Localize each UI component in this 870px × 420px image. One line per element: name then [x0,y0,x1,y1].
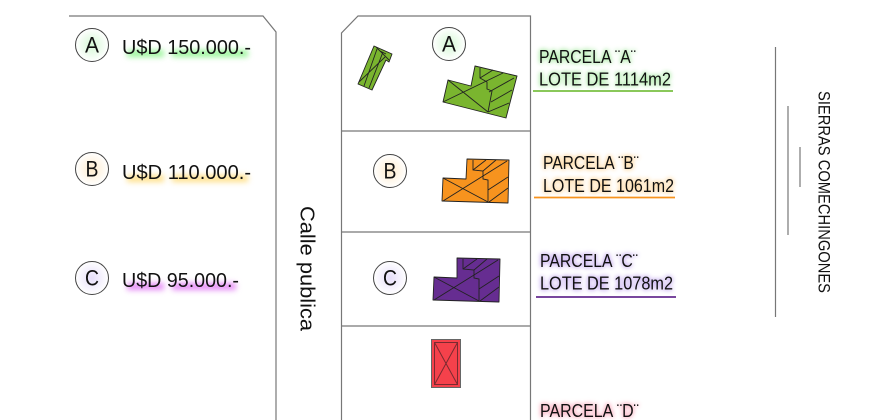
price C: U$D 95.000.- [122,270,239,292]
road label: Calle publica [296,206,318,332]
small building A [358,46,392,90]
label: parcel B [534,153,675,198]
panel: site plan [341,16,531,420]
badge: plot C: C [383,266,397,290]
mountain range label: SIERRAS COMECHINGONES [814,91,834,293]
plot A [358,28,517,118]
label: parcel A: PARCELA ¨A¨ [539,47,636,67]
badge: plot B: B [384,158,396,184]
price B: U$D 110.000.- [122,162,251,184]
badge: plot A: A [442,32,456,56]
main building A [443,66,517,118]
price A: U$D 150.000.- [122,37,251,59]
label: parcel A [533,47,673,91]
plot D building [432,340,460,388]
building B [442,159,509,203]
badge: price C [76,262,108,294]
building C [433,258,500,302]
badge: price B [76,152,108,186]
panel: price list [69,16,276,420]
label: parcel B: LOTE DE 1061m2 [543,176,674,196]
plot C [374,258,500,302]
label: parcel C: LOTE DE 1078m2 [540,274,673,294]
plot B [374,154,509,203]
badge: plot A [432,28,466,60]
left boundary line [69,16,276,420]
label: parcel B: PARCELA ¨B¨ [543,153,639,173]
badge: price C: C [85,266,99,290]
badge: price A [76,28,108,62]
badge: price B: B [86,156,98,182]
badge: price A: A [85,32,99,58]
site outline [342,16,530,420]
label: parcel C [536,251,676,297]
label: parcel A: LOTE DE 1114m2 [539,70,671,90]
label: parcel C: PARCELA ¨C¨ [540,251,638,271]
